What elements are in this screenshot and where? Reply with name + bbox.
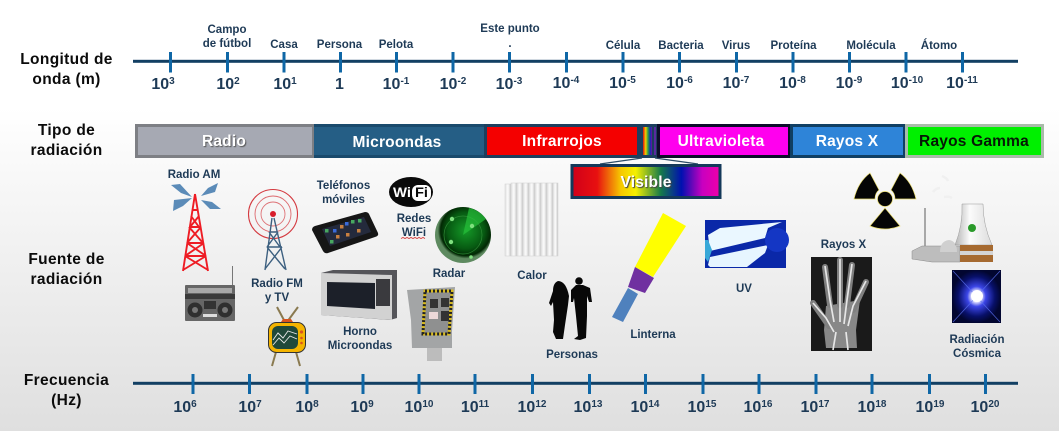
wavelength size labels xyxy=(203,23,957,52)
icon: speed camera xyxy=(407,287,455,361)
frequency values: 12 xyxy=(535,399,547,410)
wavelength values: -5 xyxy=(627,75,636,86)
row heading: longitud de onda: onda (m) xyxy=(32,71,101,88)
wavelength values xyxy=(151,75,978,93)
segment: visible slot xyxy=(640,124,657,158)
wavelength values: 1 xyxy=(291,76,297,87)
label: radiación cósmica: Cósmica xyxy=(953,348,1002,360)
label: teléfonos móviles: Teléfonos xyxy=(317,180,370,192)
frequency values: 10 xyxy=(858,399,875,416)
visible spectrum callout: Visible xyxy=(620,174,672,191)
wavelength size labels: de fútbol xyxy=(203,38,251,50)
segment: infrarrojos: Infrarrojos xyxy=(522,133,602,150)
wavelength values: 2 xyxy=(234,76,240,87)
segment: ultravioleta: Ultravioleta xyxy=(678,133,765,150)
wavelength size labels: Proteína xyxy=(770,40,817,52)
frequency values: 18 xyxy=(875,399,887,410)
wavelength values: 10 xyxy=(216,76,234,93)
wavelength values: 10 xyxy=(440,76,457,93)
wavelength size labels: Campo xyxy=(208,24,246,36)
icon: AM tower xyxy=(171,183,221,271)
wavelength values: 10 xyxy=(779,75,797,92)
icon: radar xyxy=(435,207,491,263)
wavelength size labels: Átomo xyxy=(921,39,957,52)
wavelength size labels: Este punto xyxy=(480,23,540,35)
icon: FM tower xyxy=(248,190,298,270)
segment: rayos x: Rayos X xyxy=(816,133,879,150)
segment: radio xyxy=(136,126,314,156)
frequency values: 19 xyxy=(933,399,945,410)
frequency values: 9 xyxy=(368,399,374,410)
label: redes wifi xyxy=(397,213,431,239)
label: horno microondas: Microondas xyxy=(328,340,392,352)
row heading: tipo de radiación: radiación xyxy=(30,142,103,159)
wavelength size labels: Casa xyxy=(270,39,298,51)
icon: microwave xyxy=(321,270,397,320)
segment: rayos gamma xyxy=(906,126,1042,156)
wavelength values: 10 xyxy=(891,75,909,92)
segment: ultravioleta xyxy=(658,126,790,156)
frequency values: 10 xyxy=(405,399,422,416)
row heading: fuente de radiación: radiación xyxy=(30,271,103,288)
wavelength values: -10 xyxy=(909,75,924,86)
frequency values: 7 xyxy=(256,399,262,410)
frequency values: 10 xyxy=(744,399,761,416)
label: radio am: Radio AM xyxy=(168,169,220,181)
icon: radiation symbol xyxy=(854,173,916,229)
wavelength size labels: Persona xyxy=(317,39,363,51)
label: radio fm y tv: y TV xyxy=(265,292,289,304)
icon: wifi logo: Wi xyxy=(393,184,411,200)
wavelength size labels: Molécula xyxy=(846,40,896,52)
wavelength values: 1 xyxy=(335,76,344,93)
segment: radio: Radio xyxy=(202,133,246,150)
wavelength size labels: Bacteria xyxy=(658,40,704,52)
wavelength values: -6 xyxy=(684,75,693,86)
frequency values xyxy=(173,399,1000,416)
row heading: frecuencia: Frecuencia xyxy=(24,372,109,389)
wavelength values: 10 xyxy=(666,75,684,92)
label: redes wifi: WiFi xyxy=(402,227,426,239)
wavelength values: 10 xyxy=(609,75,627,92)
wavelength values: 10 xyxy=(723,75,740,92)
icon: smartphone xyxy=(312,212,378,253)
frequency values: 11 xyxy=(479,399,490,410)
wavelength values: 10 xyxy=(836,75,853,92)
row heading: fuente de radiación: Fuente de xyxy=(28,251,105,268)
row heading: longitud de onda: Longitud de xyxy=(20,51,113,68)
icon: wifi logo xyxy=(389,177,433,207)
wavelength size labels: Virus xyxy=(722,40,750,52)
wavelength values: 3 xyxy=(169,76,175,87)
wavelength values: -11 xyxy=(964,75,978,86)
wavelength values: 10 xyxy=(383,76,400,93)
label: uv: UV xyxy=(736,283,752,295)
image: cosmic radiation star xyxy=(952,270,1001,323)
frequency values: 13 xyxy=(591,399,603,410)
frequency values: 10 xyxy=(461,399,479,416)
frequency values: 6 xyxy=(191,399,197,410)
icon: television xyxy=(268,307,306,366)
frequency values: 10 xyxy=(238,399,256,416)
icon: people silhouettes xyxy=(549,277,592,340)
wavelength values: -8 xyxy=(797,75,806,86)
wavelength values: -3 xyxy=(513,76,523,87)
segment: rayos x xyxy=(792,126,904,156)
frequency values: 14 xyxy=(648,399,660,410)
wavelength values: -2 xyxy=(457,76,467,87)
label: redes wifi: Redes xyxy=(397,213,431,225)
frequency values: 10 xyxy=(350,399,368,416)
wavelength values: -7 xyxy=(740,75,750,86)
wavelength values: -9 xyxy=(853,75,863,86)
row heading: tipo de radiación: Tipo de xyxy=(38,122,95,139)
frequency values: 10 xyxy=(295,399,313,416)
label: radio fm y tv: Radio FM xyxy=(251,278,303,290)
segment: microondas: Microondas xyxy=(353,134,441,151)
radiation type bar xyxy=(136,124,1042,158)
icon: nuclear plant xyxy=(912,176,993,262)
frequency values: 17 xyxy=(818,399,830,410)
label: horno microondas: Horno xyxy=(343,326,377,338)
wavelength size labels: Célula xyxy=(606,40,641,52)
frequency values: 10 xyxy=(801,399,818,416)
label: calor: Calor xyxy=(517,270,547,282)
frequency axis xyxy=(133,374,1018,394)
image: hand x-ray xyxy=(811,257,872,351)
frequency values: 8 xyxy=(313,399,319,410)
frequency values: 10 xyxy=(422,399,434,410)
label: personas: Personas xyxy=(546,349,598,361)
wavelength values: 10 xyxy=(553,75,570,92)
wavelength values: -4 xyxy=(570,75,580,86)
frequency values: 15 xyxy=(705,399,717,410)
icon: wifi logo: Fi xyxy=(415,184,428,200)
wavelength values: 10 xyxy=(151,76,169,93)
label: rayos x: Rayos X xyxy=(821,239,867,251)
segment: rayos gamma: Rayos Gamma xyxy=(919,133,1029,150)
wavelength size labels: . xyxy=(508,38,512,50)
icon: flashlight xyxy=(612,213,686,322)
label: radiación cósmica: Radiación xyxy=(950,334,1004,346)
segment: infrarrojos xyxy=(486,126,638,156)
wavelength values: -1 xyxy=(400,76,410,87)
icon: boombox xyxy=(185,266,235,321)
label: teléfonos móviles: móviles xyxy=(322,194,365,206)
visible spectrum callout xyxy=(572,158,720,198)
frequency values: 10 xyxy=(518,399,535,416)
frequency values: 10 xyxy=(688,399,705,416)
frequency values: 10 xyxy=(971,399,988,416)
frequency values: 20 xyxy=(988,399,1000,410)
frequency values: 10 xyxy=(173,399,191,416)
frequency values: 10 xyxy=(574,399,591,416)
label: radar: Radar xyxy=(433,268,466,280)
image: UV tanning bed xyxy=(705,220,789,268)
frequency values: 16 xyxy=(761,399,773,410)
row heading: frecuencia: (Hz) xyxy=(51,392,82,409)
wavelength values: 10 xyxy=(946,75,964,92)
label: linterna: Linterna xyxy=(630,329,676,341)
wavelength size labels: Pelota xyxy=(379,39,414,51)
frequency values: 10 xyxy=(916,399,933,416)
wavelength values: 10 xyxy=(273,76,291,93)
wavelength values: 10 xyxy=(496,76,513,93)
frequency values: 10 xyxy=(631,399,648,416)
segment: microondas xyxy=(314,124,484,158)
icon: radiator xyxy=(505,183,558,256)
wavelength axis xyxy=(133,52,1018,72)
